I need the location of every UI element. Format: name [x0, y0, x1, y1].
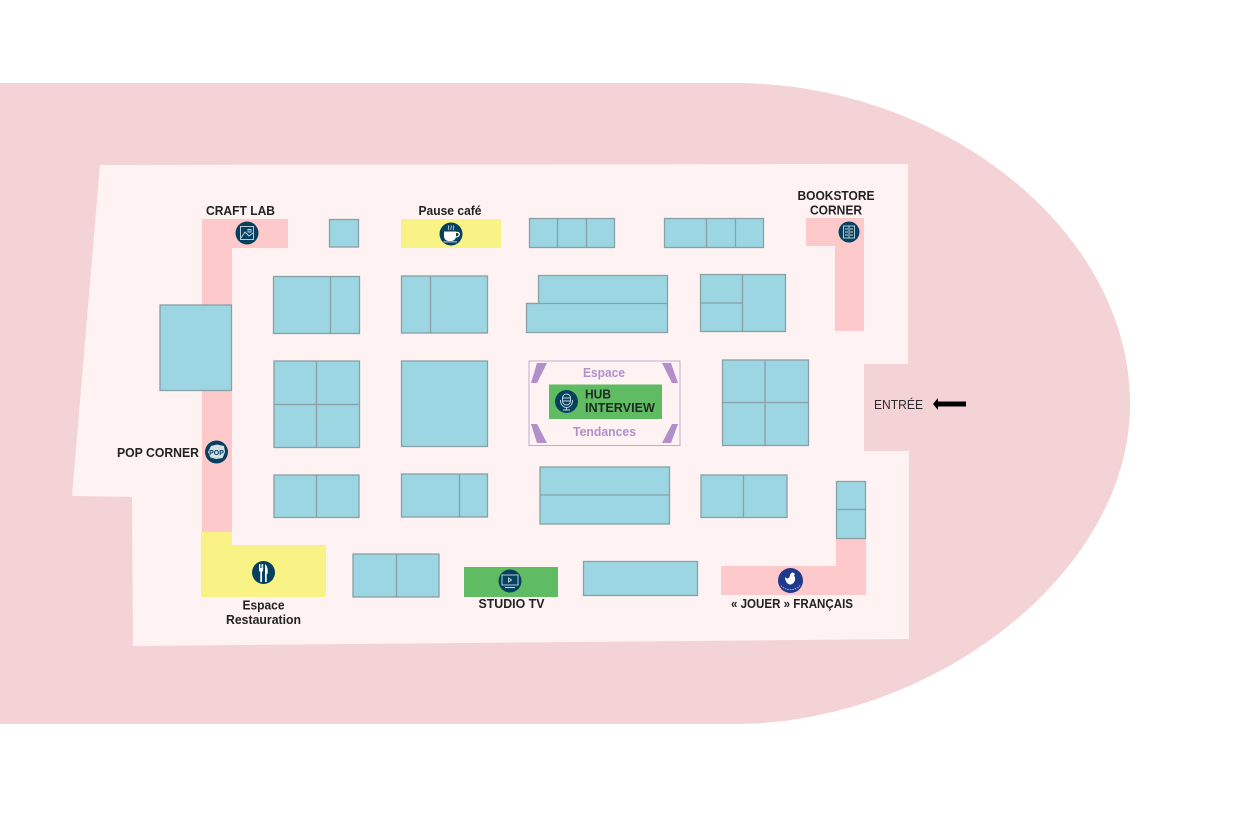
zone: Pause café	[401, 219, 501, 248]
zone: Jouer Français	[721, 535, 866, 595]
label: Pause café: Pause café	[418, 204, 482, 218]
label: Hub Interview: INTERVIEW	[585, 401, 655, 415]
panel: Espace Tendances	[529, 361, 680, 446]
stands: top row	[330, 218, 764, 248]
label: Espace Restauration: Espace	[242, 598, 285, 612]
label: Espace Restauration: Restauration	[226, 613, 301, 627]
label: Pop Corner: POP CORNER	[117, 446, 199, 460]
zone: Bookstore Corner	[806, 218, 864, 331]
label: Entrée: ENTRÉE	[874, 397, 923, 412]
background hall shape	[0, 83, 1130, 724]
icon: pop	[205, 440, 228, 464]
zone: Hub Interview	[549, 384, 662, 419]
icon: book	[838, 222, 860, 242]
stands: fourth row	[274, 467, 866, 538]
zone: Espace Restauration	[201, 532, 326, 597]
label: Jouer Français: « JOUER » FRANÇAIS	[731, 597, 853, 611]
label: Hub Interview: HUB	[585, 388, 611, 402]
label: Bookstore Corner: CORNER	[810, 204, 862, 218]
icon: coffee cup	[440, 222, 462, 246]
icon: microphone	[555, 390, 578, 413]
label: Studio TV: STUDIO TV	[478, 597, 545, 611]
zone: Studio TV	[464, 567, 558, 597]
stands: bottom row	[353, 554, 698, 597]
floor area	[72, 164, 909, 646]
label: Espace: Espace	[583, 366, 625, 380]
icon: rooster	[778, 568, 803, 593]
stands: third row	[274, 360, 808, 448]
icon: pop: POP	[209, 450, 224, 457]
label: Tendances: Tendances	[573, 425, 636, 439]
corner markers	[531, 363, 678, 443]
label: Bookstore Corner: BOOKSTORE	[798, 189, 874, 203]
stand: large left	[160, 305, 232, 390]
icon: cutlery	[252, 561, 275, 584]
zone: Craft Lab and Pop Corner strip	[202, 219, 288, 535]
arrow: entrance	[933, 398, 966, 410]
label: Craft Lab: CRAFT LAB	[206, 204, 275, 218]
icon: TV	[498, 570, 522, 592]
icon: craft lab	[236, 222, 258, 244]
stands: second row	[274, 274, 786, 334]
